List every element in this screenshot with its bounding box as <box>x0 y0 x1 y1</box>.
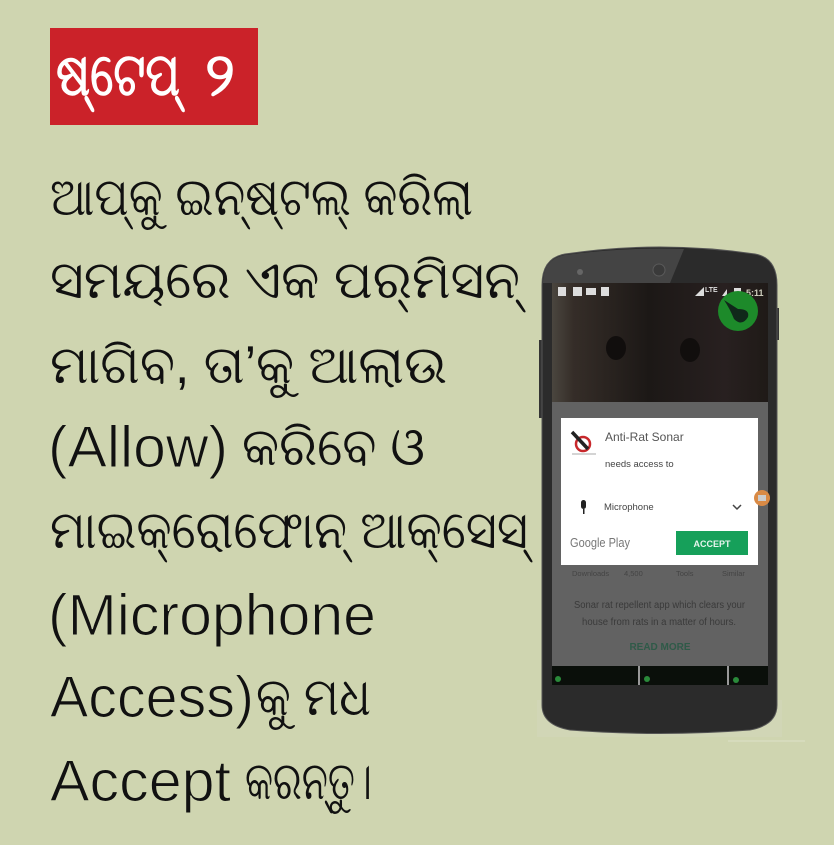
screen top: rat photo: LTE <box>705 287 718 294</box>
permission dialog: Anti-Rat Sonar <box>605 430 684 444</box>
screen dimmed body: READ MORE <box>629 642 691 653</box>
text line 7: Access) <box>50 665 254 730</box>
screen top: rat photo <box>552 283 768 402</box>
text line 4 <box>48 415 425 480</box>
text line 8 <box>50 749 372 814</box>
accept button: ACCEPT <box>693 539 731 549</box>
phone illustration <box>537 247 805 741</box>
heading badge: step 2: ୨ <box>205 41 235 108</box>
screen dimmed body: 4,500 <box>624 569 643 578</box>
text line 4: କରିବେ ଓ <box>242 418 425 477</box>
text line 7: କୁ ମଧ <box>256 668 371 729</box>
photo backing <box>537 700 782 737</box>
heading badge: step 2: ଷ୍ଟେପ୍ <box>56 41 185 111</box>
app icon <box>572 432 596 454</box>
green badge <box>718 291 758 331</box>
text line 1: ଆପ୍‌କୁ ଇନ୍‌ଷ୍ଟଲ୍ କରିଲା <box>50 168 473 230</box>
screen dimmed body: house from rats in a matter of hours. <box>582 617 736 628</box>
screen top: rat photo: 5:11 <box>746 288 764 298</box>
phone body <box>539 247 779 734</box>
permission dialog: Google Play <box>570 535 630 550</box>
status bar icons <box>558 287 741 297</box>
text line 2: ସମୟରେ ଏକ ପର୍‌ମିସନ୍ <box>50 251 527 313</box>
camera <box>577 269 583 275</box>
screen dimmed body: Downloads <box>572 569 609 578</box>
text line 3: ମାଗିବ, ତା’କୁ ଆଲାଉ <box>50 336 447 397</box>
text line 4: (Allow) <box>48 415 228 480</box>
permission dialog: Microphone <box>604 502 654 513</box>
text line 6: (Microphone <box>48 583 376 648</box>
accept button <box>676 531 748 555</box>
text line 8: କରନ୍ତୁ। <box>245 752 372 814</box>
permission dialog: needs access to <box>605 459 674 470</box>
text line 7 <box>50 665 371 730</box>
screen dimmed body: Similar <box>722 569 745 578</box>
microphone icon <box>581 500 586 514</box>
orange floating badge <box>754 490 770 506</box>
text line 5: ମାଇକ୍ରୋଫୋନ୍ ଆକ୍‌ସେସ୍ <box>50 501 533 563</box>
screen dimmed body: Tools <box>676 569 694 578</box>
screenshot strip <box>552 666 768 685</box>
permission dialog <box>561 418 758 565</box>
screen dimmed body <box>552 402 768 666</box>
heading badge: step 2 <box>50 28 258 125</box>
instruction text block <box>48 168 533 814</box>
screen dimmed body: Sonar rat repellent app which clears your <box>574 600 746 611</box>
text line 8: Accept <box>50 749 231 814</box>
